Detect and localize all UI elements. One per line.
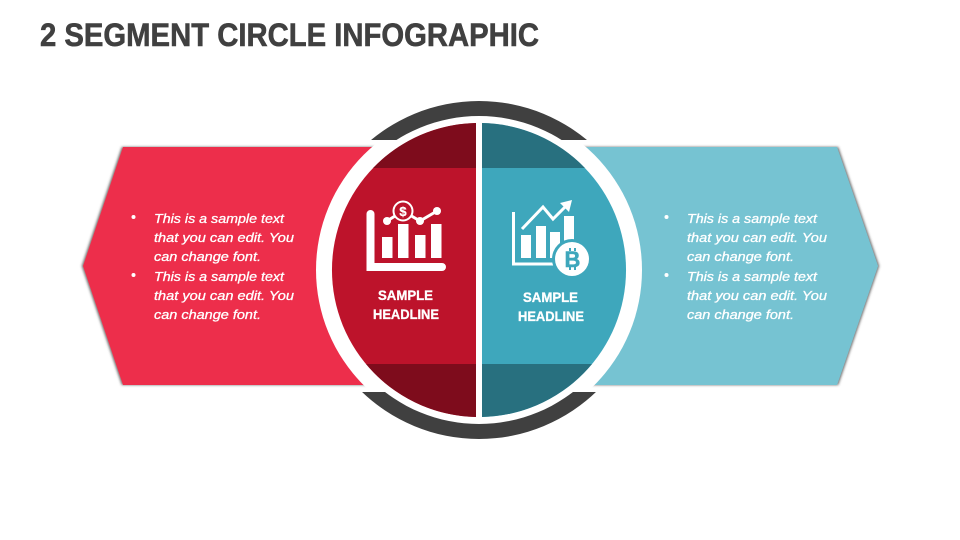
white circle backing bbox=[316, 107, 642, 433]
right headline bbox=[518, 290, 584, 324]
right bullet text: can change font. bbox=[687, 249, 794, 264]
icon: bar chart with dollar: $ bbox=[399, 204, 407, 219]
left bullet text: This is a sample text bbox=[154, 211, 286, 226]
right bullet text bbox=[664, 211, 827, 322]
bottom dark arc bbox=[362, 392, 596, 439]
left semicircle segment bbox=[332, 123, 476, 417]
left bullet text: This is a sample text bbox=[154, 269, 286, 284]
right bullet text: This is a sample text bbox=[687, 211, 819, 226]
left headline: HEADLINE bbox=[373, 307, 439, 322]
panel: left red arrow bbox=[83, 147, 480, 385]
left bullet text: can change font. bbox=[154, 307, 261, 322]
right bullet text: that you can edit. You bbox=[687, 230, 827, 245]
left bullet text: that you can edit. You bbox=[154, 230, 294, 245]
right bullet text: that you can edit. You bbox=[687, 288, 827, 303]
title: 2 SEGMENT CIRCLE INFOGRAPHIC bbox=[40, 17, 539, 53]
right semicircle segment bbox=[482, 123, 626, 417]
left bullet text: can change font. bbox=[154, 249, 261, 264]
left bullet text: that you can edit. You bbox=[154, 288, 294, 303]
left headline bbox=[373, 288, 439, 322]
icon: bar chart with dollar bbox=[370, 202, 442, 267]
right bullet text: This is a sample text bbox=[687, 269, 819, 284]
right headline: HEADLINE bbox=[518, 309, 584, 324]
top dark arc bbox=[371, 101, 587, 140]
right headline: SAMPLE bbox=[523, 290, 578, 305]
icon: bar chart with bitcoin bbox=[514, 200, 592, 279]
right bullet text: can change font. bbox=[687, 307, 794, 322]
left headline: SAMPLE bbox=[378, 288, 433, 303]
icon: bar chart with bitcoin: B bbox=[565, 247, 580, 272]
dark caps of circle bbox=[366, 123, 592, 417]
panel: right teal arrow bbox=[480, 147, 878, 385]
left bullet text bbox=[132, 211, 294, 322]
